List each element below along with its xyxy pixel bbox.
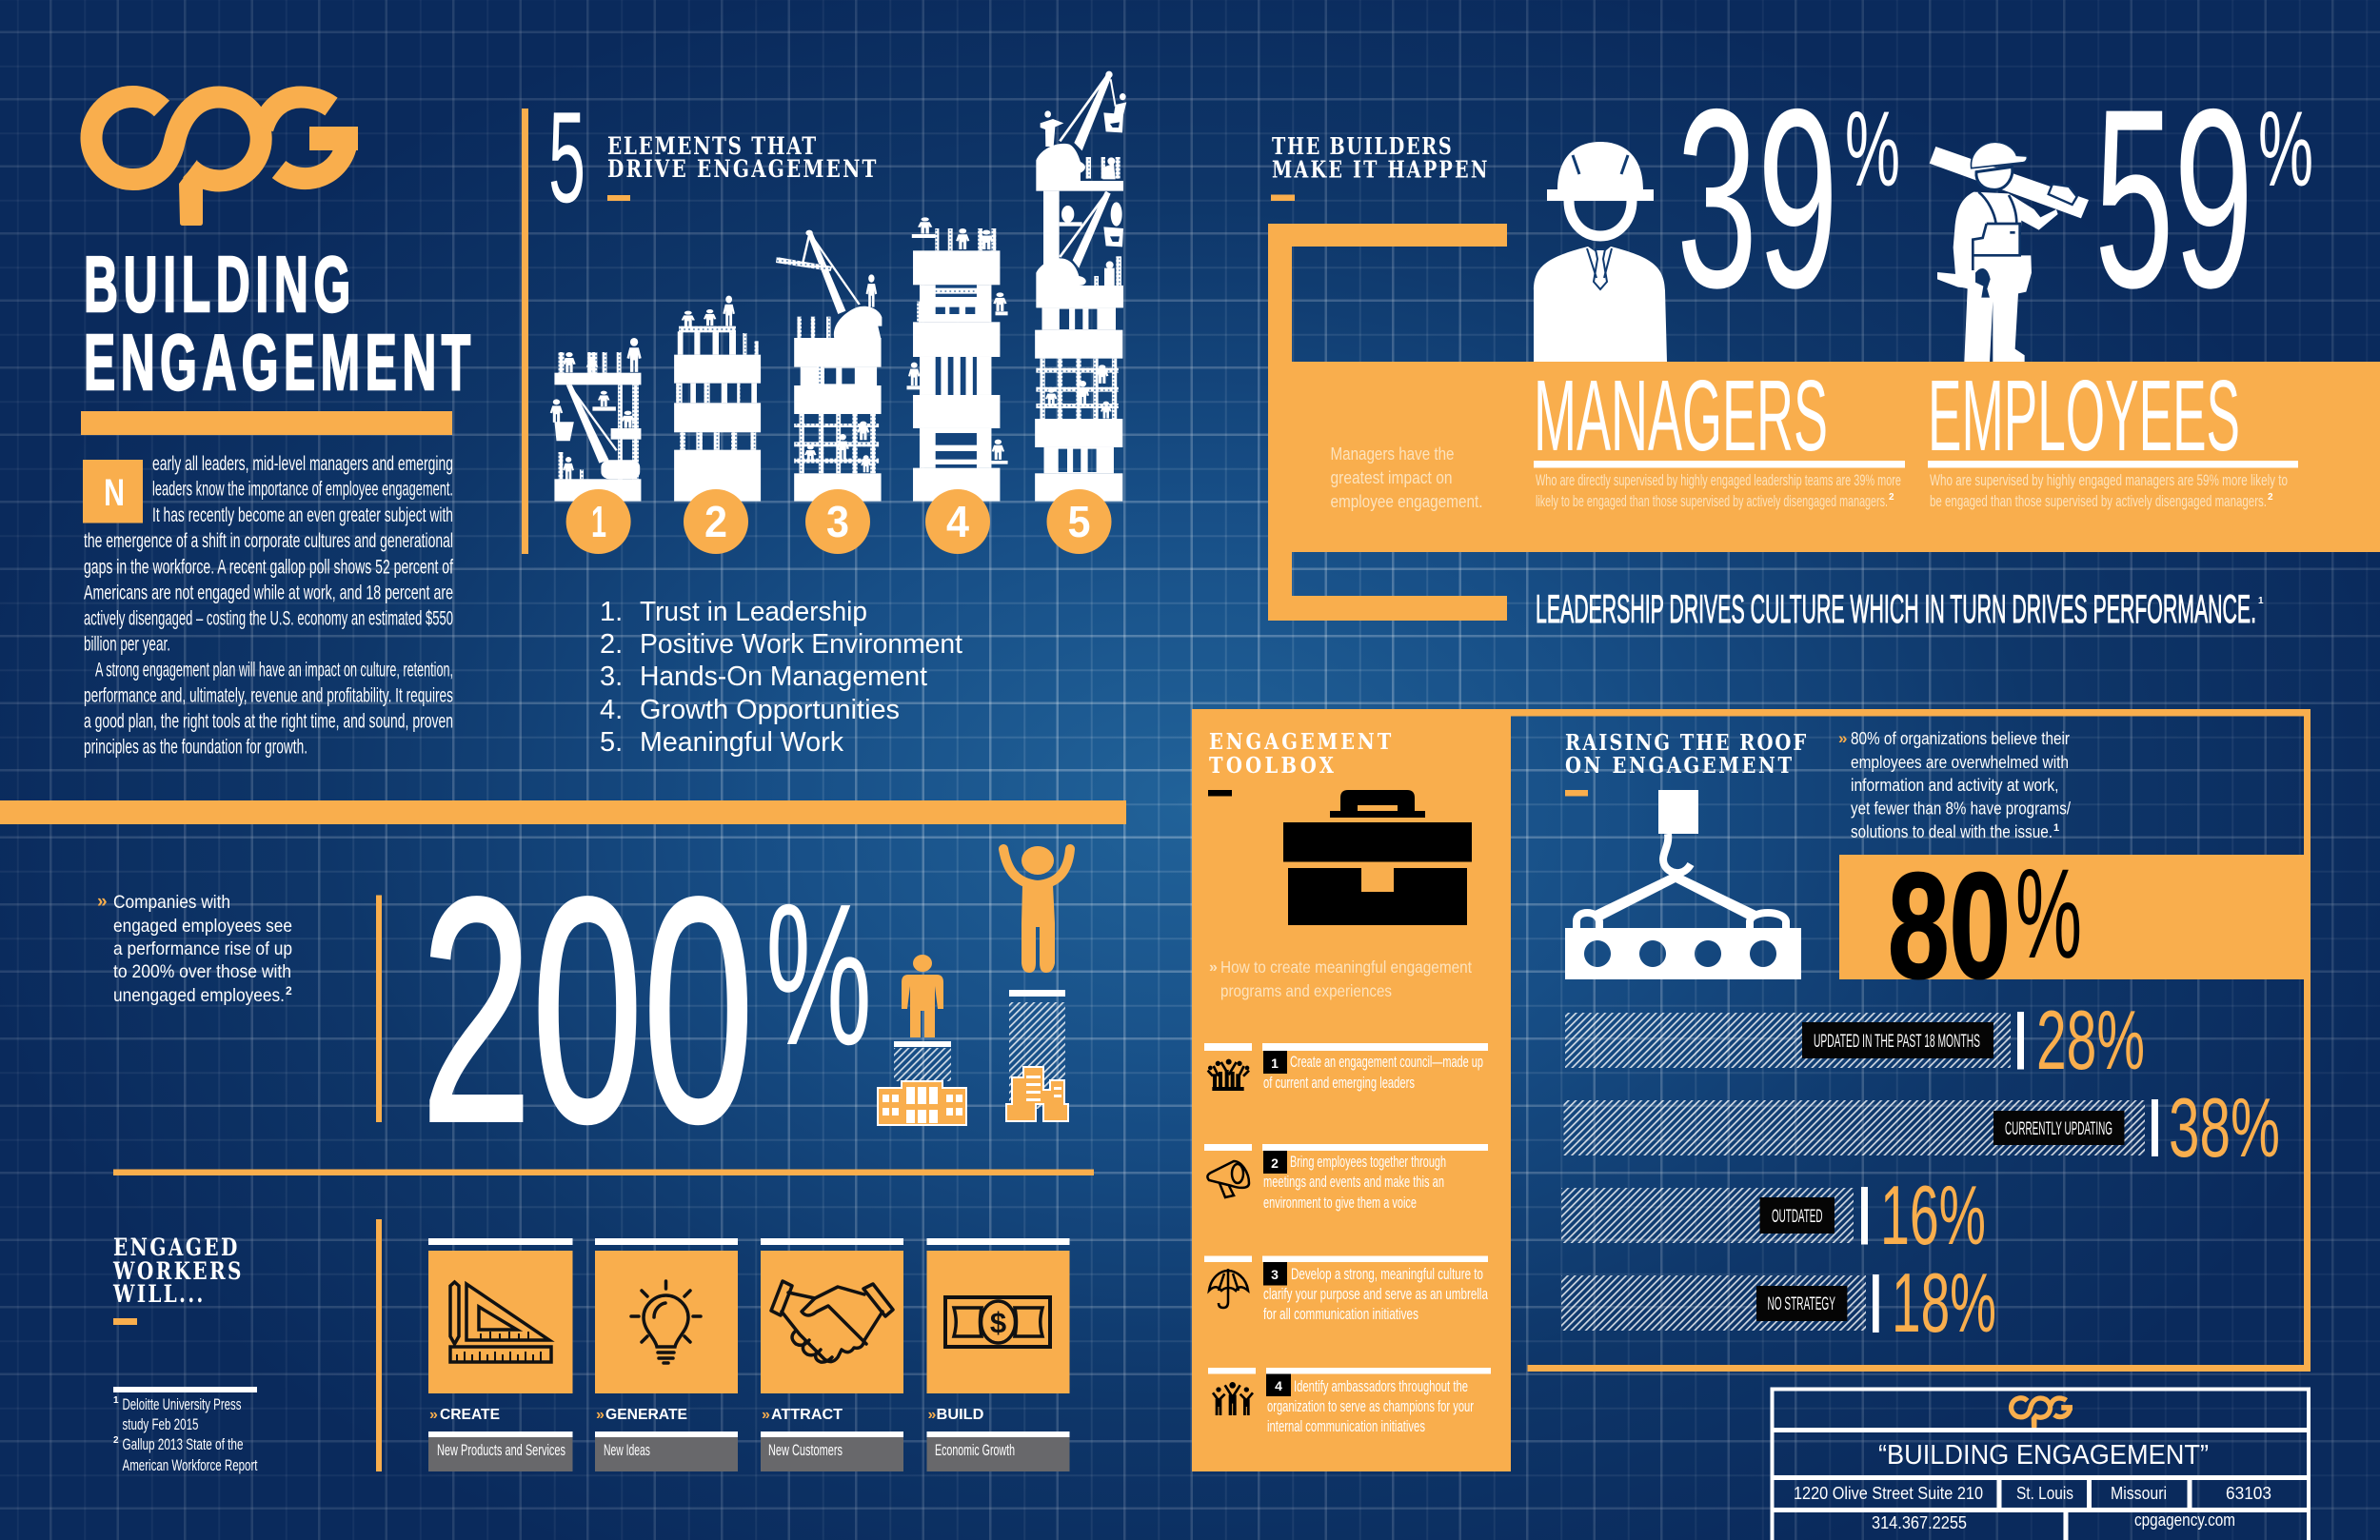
icon: dollar bill bbox=[945, 1297, 1050, 1347]
intro paragraph: Americans are not engaged while at work, and 18 percent are bbox=[84, 582, 453, 603]
toolbox step 4: organization to serve as champions for your bbox=[1267, 1397, 1474, 1415]
title block: 314.367.2255 bbox=[1872, 1513, 1967, 1532]
card: generate: GENERATE bbox=[605, 1407, 687, 1423]
text: 80 percent of organizations: » bbox=[1838, 729, 1847, 747]
text: 80 percent of organizations bbox=[1838, 728, 2072, 841]
footnotes: study Feb 2015 bbox=[122, 1415, 198, 1433]
text: companies with engaged employees: unengaged employees. bbox=[113, 985, 285, 1006]
toolbox step 2 bbox=[1204, 1144, 1488, 1212]
card: build: » bbox=[927, 1407, 937, 1423]
heading: the builders: THE BUILDERS bbox=[1272, 134, 1452, 161]
tower 1 bbox=[550, 338, 642, 502]
stat: 80 percent block bbox=[1839, 842, 2304, 1010]
five elements list: 4. bbox=[600, 695, 623, 725]
toolbox step 3 bbox=[1204, 1256, 1488, 1323]
icon: dollar bill: $ bbox=[990, 1306, 1006, 1339]
toolbox step 3: Develop a strong, meaningful culture to bbox=[1291, 1265, 1483, 1283]
bar: updated in the past 18 months 28%: UPDATED IN THE PAST 18 MONTHS bbox=[1814, 1032, 1980, 1052]
footnotes: Gallup 2013 State of the bbox=[122, 1435, 244, 1453]
icon: employee carrying a beam bbox=[1930, 142, 2089, 362]
title block: 1220 Olive Street Suite 210 bbox=[1794, 1484, 1983, 1503]
card: attract: ATTRACT bbox=[771, 1407, 843, 1423]
managers label: MANAGERS bbox=[1534, 360, 1828, 472]
text: companies with engaged employees: 2 bbox=[286, 984, 292, 997]
big stat: 200%: 200 bbox=[421, 832, 754, 1188]
stat: 59 percent: 59 bbox=[2094, 55, 2253, 341]
CPG logo bbox=[91, 97, 358, 226]
card: create: New Products and Services bbox=[437, 1441, 565, 1459]
footnotes: 1 bbox=[113, 1395, 119, 1406]
stat: 80 percent block: % bbox=[2015, 843, 2082, 985]
text: 80 percent of organizations: 80% of organizations believe their bbox=[1851, 728, 2070, 748]
bar: outdated 16%: 16% bbox=[1880, 1168, 1986, 1262]
bar: no strategy 18% bbox=[1561, 1255, 1996, 1350]
bar: outdated 16%: OUTDATED bbox=[1772, 1207, 1822, 1227]
five elements list: 2. bbox=[600, 629, 623, 660]
card: create bbox=[428, 1238, 573, 1471]
raising the roof orange frame bbox=[1511, 709, 2311, 1372]
title block: St. Louis bbox=[2016, 1484, 2073, 1503]
footnotes bbox=[113, 1387, 258, 1474]
intro paragraph: the emergence of a shift in corporate cultures and generational bbox=[84, 530, 453, 552]
managers label bbox=[1534, 360, 1905, 510]
bar: currently updating 38%: 38% bbox=[2169, 1080, 2280, 1175]
tower 3 bbox=[776, 230, 882, 502]
intro paragraph: leaders know the importance of employee engagement. bbox=[152, 478, 453, 501]
icon: small person on small building bbox=[878, 955, 966, 1125]
drop cap: N bbox=[104, 472, 125, 514]
intro paragraph: A strong engagement plan will have an impact on culture, retention, bbox=[95, 659, 453, 681]
orange divider line bbox=[113, 1169, 1094, 1175]
heading: engaged workers will: WORKERS bbox=[112, 1258, 241, 1286]
employees label bbox=[1928, 360, 2298, 510]
toolbox step 4 bbox=[1208, 1368, 1491, 1435]
managers label: likely to be engaged than those supervised by actively disengaged managers. bbox=[1536, 492, 1888, 510]
text: 80 percent of organizations: employees are overwhelmed with bbox=[1851, 752, 2069, 772]
toolbox step 2: 2 bbox=[1271, 1155, 1279, 1171]
bar: no strategy 18%: NO STRATEGY bbox=[1767, 1294, 1835, 1314]
footnotes: 2 bbox=[113, 1435, 119, 1446]
text: companies with engaged employees: a performance rise of up bbox=[113, 938, 292, 959]
toolbox step 1: 1 bbox=[1271, 1056, 1279, 1071]
icon: ambassadors group bbox=[1213, 1382, 1253, 1415]
toolbox heading: TOOLBOX bbox=[1209, 754, 1334, 779]
card: generate bbox=[595, 1238, 738, 1471]
icon: light bulb bbox=[631, 1281, 701, 1363]
intro paragraph: actively disengaged – costing the U.S. economy an estimated $550 bbox=[84, 607, 453, 630]
employees label: 2 bbox=[2268, 492, 2273, 503]
intro paragraph: early all leaders, mid-level managers and emerging bbox=[152, 453, 453, 475]
icon: manager with hard hat bbox=[1534, 142, 1667, 362]
heading: 5 elements bbox=[548, 85, 877, 229]
numbered circles bbox=[566, 489, 1112, 554]
footnotes: American Workforce Report bbox=[122, 1456, 258, 1474]
text: companies with engaged employees: to 200% over those with bbox=[113, 961, 291, 982]
text: 80 percent of organizations: 1 bbox=[2053, 822, 2059, 834]
intro paragraph: performance and, ultimately, revenue and profitability. It requires bbox=[84, 685, 453, 706]
intro paragraph: gaps in the workforce. A recent gallop poll shows 52 percent of bbox=[84, 556, 453, 579]
text: 80 percent of organizations: solutions to deal with the issue. bbox=[1851, 821, 2053, 841]
bar: updated in the past 18 months 28% bbox=[1565, 993, 2145, 1087]
icon: megaphone bbox=[1207, 1161, 1249, 1197]
text: managers impact: employee engagement. bbox=[1331, 492, 1483, 511]
heading: 5 elements: 5 bbox=[548, 85, 585, 229]
heading: 5 elements: ELEMENTS THAT bbox=[607, 133, 816, 161]
intro paragraph: principles as the foundation for growth. bbox=[84, 737, 307, 758]
five elements list: Trust in Leadership bbox=[640, 597, 867, 627]
stat: 59 percent: % bbox=[2258, 89, 2313, 208]
panel: engagement toolbox bbox=[1192, 709, 1511, 1471]
numbered circles: 5 bbox=[1068, 497, 1091, 546]
card: build bbox=[927, 1238, 1070, 1471]
tower illustrations bbox=[550, 217, 1122, 502]
toolbox step 4: Identify ambassadors throughout the bbox=[1294, 1377, 1468, 1395]
five elements list: 5. bbox=[600, 727, 623, 758]
icon: large person on tall building bbox=[1003, 846, 1070, 1121]
title block: cpgagency.com bbox=[2134, 1510, 2235, 1530]
card: build: Economic Growth bbox=[935, 1441, 1015, 1459]
title block bbox=[1773, 1390, 2309, 1540]
managers label: Who are directly supervised by highly engaged leadership teams are 39% more bbox=[1536, 471, 1901, 489]
bar: currently updating 38%: CURRENTLY UPDATING bbox=[2005, 1119, 2112, 1139]
leadership statement: 1 bbox=[2258, 596, 2264, 606]
stat: 80 percent block: 80 bbox=[1888, 842, 2011, 1010]
tower 2 bbox=[674, 296, 761, 502]
text: companies with engaged employees: Companies with bbox=[113, 892, 230, 913]
card: create: CREATE bbox=[440, 1407, 500, 1423]
toolbox step 2: meetings and events and make this an bbox=[1263, 1173, 1444, 1191]
bar: currently updating 38% bbox=[1563, 1080, 2280, 1175]
card: attract bbox=[761, 1238, 903, 1471]
text: managers impact: Managers have the bbox=[1331, 444, 1455, 464]
divider bbox=[376, 1219, 382, 1471]
intro paragraph: billion per year. bbox=[84, 634, 170, 655]
five elements list: 1. bbox=[600, 597, 623, 627]
stat: 39 percent: % bbox=[1845, 89, 1900, 208]
big stat: 200%: % bbox=[765, 861, 872, 1087]
toolbox heading: ENGAGEMENT bbox=[1209, 730, 1391, 755]
bar: no strategy 18%: 18% bbox=[1892, 1255, 1996, 1350]
divider bbox=[376, 895, 382, 1122]
toolbox step 3: for all communication initiatives bbox=[1263, 1305, 1418, 1323]
heading: the builders: MAKE IT HAPPEN bbox=[1272, 158, 1487, 184]
numbered circles: 3 bbox=[826, 497, 849, 546]
text: companies with engaged employees: » bbox=[97, 892, 108, 912]
footnotes: Deloitte University Press bbox=[122, 1395, 242, 1413]
card: build: BUILD bbox=[937, 1407, 984, 1423]
tower 4 bbox=[906, 217, 1008, 502]
icon: crane hook lifting a beam bbox=[1565, 790, 1801, 979]
toolbox step 4: internal communication initiatives bbox=[1267, 1417, 1425, 1435]
toolbox step 4: 4 bbox=[1275, 1378, 1282, 1393]
icon: drafting tools bbox=[450, 1282, 551, 1362]
icon: umbrella bbox=[1209, 1269, 1248, 1308]
icon: toolbox bbox=[1283, 790, 1472, 925]
five elements list: 3. bbox=[600, 661, 623, 692]
toolbox intro: How to create meaningful engagement bbox=[1220, 958, 1472, 977]
card: generate: » bbox=[596, 1407, 605, 1423]
toolbox step 1: Create an engagement council—made up bbox=[1290, 1053, 1483, 1071]
five elements list bbox=[600, 597, 962, 758]
toolbox step 1 bbox=[1204, 1043, 1488, 1092]
toolbox step 1: of current and emerging leaders bbox=[1263, 1074, 1415, 1092]
heading: the builders bbox=[1271, 134, 1487, 201]
tower 5 upper floors and crane bbox=[1036, 71, 1126, 307]
title block: Missouri bbox=[2111, 1484, 2167, 1503]
bar: updated in the past 18 months 28%: 28% bbox=[2036, 993, 2145, 1087]
text: companies with engaged employees bbox=[97, 892, 292, 1006]
title block: 63103 bbox=[2226, 1484, 2271, 1503]
toolbox step 3: clarify your purpose and serve as an umbrella bbox=[1263, 1285, 1488, 1303]
toolbox step 3: 3 bbox=[1271, 1267, 1279, 1282]
five elements list: Growth Opportunities bbox=[640, 695, 900, 725]
toolbox step 2: environment to give them a voice bbox=[1263, 1194, 1417, 1212]
numbered circles: 4 bbox=[946, 497, 969, 546]
long orange divider bbox=[0, 800, 1126, 824]
card: attract: » bbox=[762, 1407, 770, 1423]
intro paragraph: It has recently become an even greater subject with bbox=[152, 504, 453, 526]
text: 80 percent of organizations: yet fewer than 8% have programs/ bbox=[1851, 798, 2072, 819]
heading: raising the roof: ON ENGAGEMENT bbox=[1565, 754, 1792, 779]
five elements list: Meaningful Work bbox=[640, 727, 843, 758]
heading: engaged workers will bbox=[112, 1234, 241, 1325]
icon: council group bbox=[1208, 1059, 1249, 1091]
drop cap bbox=[83, 460, 143, 523]
toolbox intro: programs and experiences bbox=[1220, 981, 1392, 1000]
managers label: 2 bbox=[1889, 492, 1894, 503]
heading: 5 elements: DRIVE ENGAGEMENT bbox=[607, 156, 877, 184]
title underline bar bbox=[81, 411, 452, 435]
text: managers impact bbox=[1331, 444, 1483, 511]
toolbox intro: » bbox=[1209, 959, 1218, 976]
tower 5 lower floors bbox=[1035, 286, 1122, 502]
card: create: » bbox=[429, 1407, 438, 1423]
managers and employees orange bracket panel bbox=[1268, 224, 2380, 621]
bar: outdated 16% bbox=[1561, 1168, 1986, 1262]
icon: handshake bbox=[771, 1281, 893, 1362]
text: managers impact: greatest impact on bbox=[1331, 468, 1453, 487]
title: ENGAGEMENT bbox=[84, 318, 470, 406]
numbered circles: 2 bbox=[704, 497, 727, 546]
heading: raising the roof: RAISING THE ROOF bbox=[1565, 731, 1806, 756]
title: BUILDING bbox=[84, 240, 350, 328]
five elements list: Hands-On Management bbox=[640, 661, 927, 692]
card: generate: New Ideas bbox=[604, 1441, 650, 1459]
toolbox intro bbox=[1209, 958, 1472, 1000]
intro paragraph: a good plan, the right tools at the right time, and sound, proven bbox=[84, 710, 453, 733]
numbered circles: 1 bbox=[591, 497, 606, 546]
text: 80 percent of organizations: information and activity at work, bbox=[1851, 775, 2058, 795]
five elements list: Positive Work Environment bbox=[640, 629, 962, 660]
intro paragraph bbox=[84, 453, 453, 758]
card: attract: New Customers bbox=[768, 1441, 843, 1459]
toolbox heading bbox=[1208, 730, 1391, 796]
section divider: five elements bbox=[522, 109, 528, 554]
heading: engaged workers will: ENGAGED bbox=[113, 1234, 237, 1262]
stat: 39 percent: 39 bbox=[1676, 55, 1838, 341]
title block: “BUILDING ENGAGEMENT” bbox=[1878, 1440, 2209, 1471]
small CPG logo bbox=[2012, 1398, 2073, 1428]
text: companies with engaged employees: engaged employees see bbox=[113, 916, 292, 937]
toolbox step 2: Bring employees together through bbox=[1290, 1153, 1446, 1171]
title bbox=[84, 240, 470, 406]
heading: raising the roof bbox=[1565, 731, 1806, 796]
heading: engaged workers will: WILL... bbox=[112, 1281, 203, 1309]
